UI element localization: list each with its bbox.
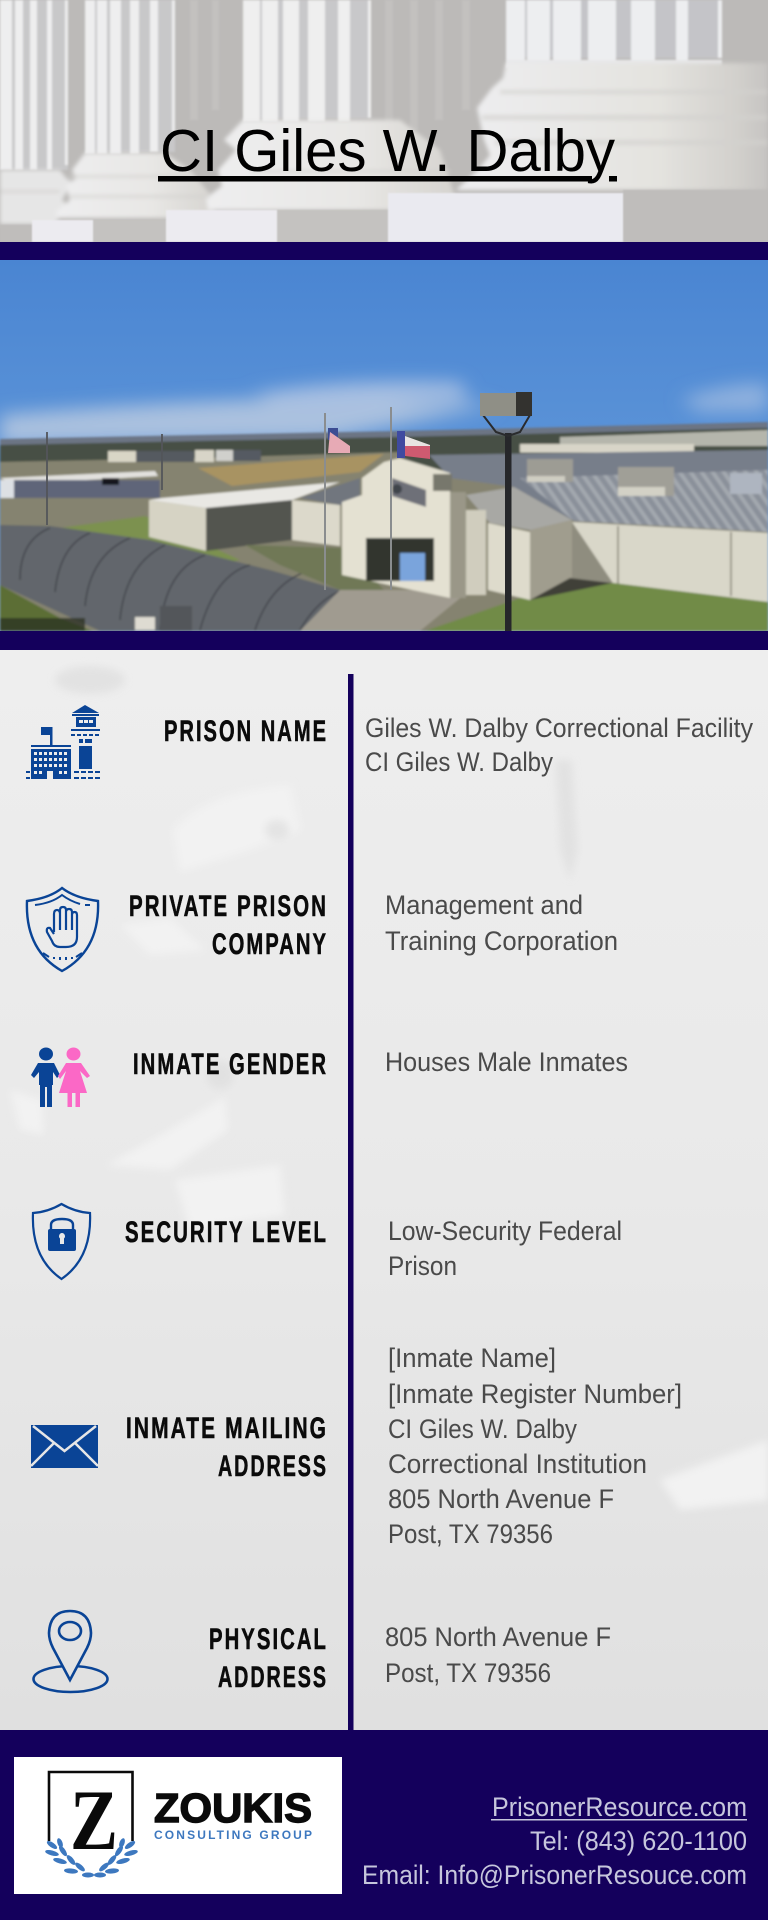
row: inmate gender <box>31 1047 628 1107</box>
value: inmate mailing address: Correctional Institution <box>388 1449 647 1479</box>
shadow <box>530 578 612 600</box>
value: private prison company: Training Corporation <box>385 926 618 956</box>
label: inmate mailing address: INMATE MAILING <box>126 1412 328 1445</box>
label: physical address <box>209 1623 328 1694</box>
photo: prison facility aerial view <box>0 260 768 631</box>
contact details: PrisonerResource.com <box>492 1792 747 1822</box>
value: security level: Low-Security Federal <box>388 1216 622 1246</box>
header banner with classical columns <box>0 0 768 242</box>
logo card <box>14 1757 342 1894</box>
column 1 base <box>0 170 72 224</box>
label: physical address: ADDRESS <box>218 1661 328 1694</box>
contact details: Tel: (843) 620-1100 <box>530 1826 747 1856</box>
ground base <box>0 460 768 631</box>
label: security level: SECURITY LEVEL <box>125 1216 328 1249</box>
row: physical address <box>34 1611 611 1694</box>
distant tree line <box>0 424 768 470</box>
title: CI Giles W. Dalby <box>160 118 615 184</box>
flag poles and flags <box>325 407 391 590</box>
tan field <box>198 454 384 486</box>
logo wordmark: ZOUKIS <box>154 1785 312 1831</box>
row: inmate mailing address <box>31 1343 682 1549</box>
scrub near fence <box>245 545 384 605</box>
icon: location pin <box>34 1611 108 1692</box>
icon: male and female figures <box>31 1048 90 1107</box>
long wall <box>572 522 768 602</box>
value: inmate mailing address: [Inmate Name] <box>388 1343 556 1373</box>
label: private prison company <box>129 890 328 961</box>
textured paper panel <box>0 650 768 1730</box>
value: private prison company <box>385 890 618 956</box>
label: prison name: PRISON NAME <box>164 715 328 748</box>
icon: shield with padlock <box>33 1204 90 1279</box>
value: inmate mailing address: 805 North Avenue F <box>388 1484 614 1514</box>
main roof <box>429 450 768 531</box>
logo mark: Z in shield with laurel <box>45 1772 138 1878</box>
label: private prison company: PRIVATE PRISON <box>129 890 328 923</box>
row: private prison company <box>27 888 618 971</box>
fence <box>0 525 384 631</box>
column 4 shaft <box>506 0 722 58</box>
logo wordmark: CONSULTING GROUP <box>154 1828 312 1842</box>
label: inmate mailing address: ADDRESS <box>218 1450 328 1483</box>
left building <box>0 471 158 484</box>
navy band middle <box>0 631 768 650</box>
column 3 shaft <box>243 0 371 118</box>
column 3 base <box>206 120 456 210</box>
lamp post <box>505 433 512 631</box>
navy band top <box>0 242 768 260</box>
value: inmate mailing address <box>388 1343 682 1549</box>
icon: shield with raised hand <box>27 888 98 971</box>
label: inmate gender: INMATE GENDER <box>133 1048 328 1081</box>
value: physical address: 805 North Avenue F <box>385 1622 611 1652</box>
value: inmate mailing address: Post, TX 79356 <box>388 1519 553 1549</box>
footer band <box>0 1730 768 1920</box>
value: inmate gender: Houses Male Inmates <box>385 1047 628 1077</box>
rooftop units <box>527 459 573 482</box>
value: prison name: Giles W. Dalby Correctional Facility <box>365 713 754 743</box>
column 2 base <box>56 153 215 218</box>
value: private prison company: Management and <box>385 890 583 920</box>
value: security level <box>388 1216 622 1281</box>
pavement <box>300 590 470 631</box>
gate building <box>149 500 206 551</box>
value: prison name <box>365 713 754 777</box>
faint background flutes <box>190 0 470 130</box>
label: physical address: PHYSICAL <box>209 1623 328 1656</box>
column 4 base <box>456 63 768 190</box>
low wing <box>466 487 572 530</box>
value: security level: Prison <box>388 1251 457 1281</box>
value: physical address: Post, TX 79356 <box>385 1658 551 1688</box>
value: inmate mailing address: CI Giles W. Dalby <box>388 1414 578 1444</box>
grass <box>425 583 768 631</box>
label: private prison company: COMPANY <box>212 928 328 961</box>
value: prison name: CI Giles W. Dalby <box>365 747 554 777</box>
row: prison name <box>26 705 754 779</box>
column 2 shaft <box>85 0 175 152</box>
vertical divider <box>348 674 354 1730</box>
column 1 shaft <box>0 0 68 170</box>
icon: envelope <box>31 1425 98 1468</box>
row: security level <box>33 1204 622 1281</box>
entry building <box>342 458 464 598</box>
logo mark: Z in shield with laurel: Z <box>70 1772 118 1868</box>
back buildings <box>108 451 136 462</box>
base mouldings <box>0 90 768 198</box>
contact details <box>362 1792 747 1890</box>
icon: prison building and watchtower <box>26 705 100 779</box>
label: inmate mailing address <box>126 1412 328 1483</box>
contact details: Email: Info@PrisonerResouce.com <box>362 1860 747 1890</box>
value: inmate mailing address: [Inmate Register Number] <box>388 1379 682 1409</box>
green strip <box>60 516 240 565</box>
value: physical address <box>385 1622 611 1688</box>
